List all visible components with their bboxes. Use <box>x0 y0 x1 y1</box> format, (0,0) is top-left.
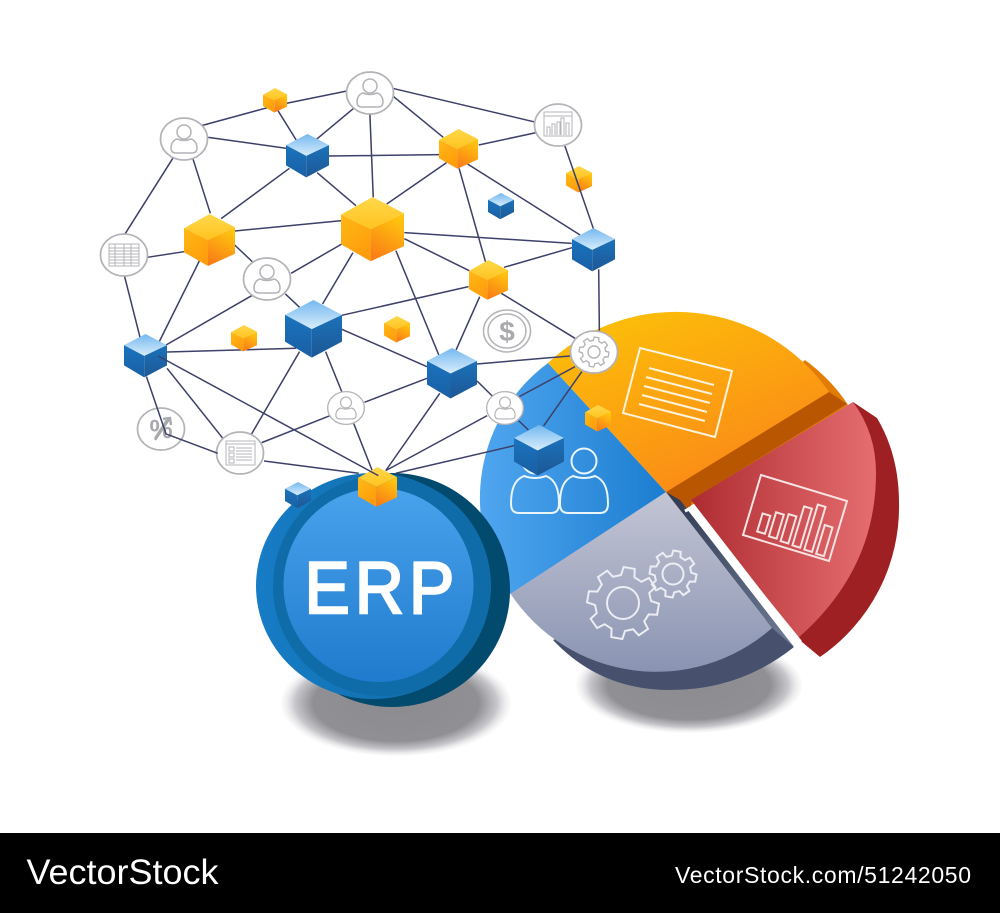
sphere: face <box>284 488 474 682</box>
cube: blue small bottom <box>285 482 311 508</box>
cube: orange top right <box>439 129 478 169</box>
icon: document on orange slice <box>623 348 732 437</box>
node: user small right <box>487 392 523 424</box>
pie: orange slice inner wall <box>666 392 847 512</box>
node: chart <box>534 104 582 146</box>
pie: orange slice <box>548 312 829 492</box>
footer bar <box>0 833 1000 913</box>
sphere: outer ring <box>256 473 490 699</box>
node: user middle <box>244 258 290 300</box>
overlaid connections crossing nodes <box>146 356 378 476</box>
cube: orange large center <box>341 197 404 261</box>
cube: orange small center <box>384 316 410 343</box>
cube: orange small left <box>231 325 257 352</box>
pie: red slice side <box>790 402 899 657</box>
node: percent <box>138 408 184 450</box>
cube: orange right middle <box>469 260 508 300</box>
pie: gray slice side <box>553 620 794 690</box>
pie: blue slice <box>480 363 666 594</box>
node: form <box>216 432 264 474</box>
cube: blue lower right <box>427 348 477 398</box>
sphere: inner ring <box>273 476 491 696</box>
shadow: ERP sphere <box>281 650 511 756</box>
sphere: dark back <box>274 473 510 707</box>
pie: orange slice side <box>666 360 848 512</box>
cube: blue large center <box>285 300 342 358</box>
cube: blue right <box>572 228 615 271</box>
node: user small center <box>328 392 364 424</box>
pie chart <box>480 312 899 690</box>
icon: gears on gray slice <box>582 547 700 644</box>
cube: blue small floating <box>488 193 514 219</box>
node: dollar <box>484 310 530 352</box>
node: percent: % <box>149 414 173 444</box>
pie: white gap <box>685 507 800 650</box>
pie: gray slice <box>510 492 772 672</box>
small cube: orange right <box>566 166 592 193</box>
pie: gray slice inner wall <box>666 492 794 647</box>
network connections <box>124 88 599 473</box>
cube: blue top <box>286 134 329 177</box>
node: user left <box>160 118 208 160</box>
cube: orange on pie <box>585 405 611 432</box>
shadow: pie <box>576 637 802 733</box>
cube: orange left <box>184 214 235 266</box>
footer url: VectorStock.com/51242050 <box>675 862 971 888</box>
ERP sphere <box>256 473 510 707</box>
node: gear <box>570 331 618 373</box>
node: table <box>100 234 148 276</box>
cube: blue on pie <box>514 425 564 476</box>
icon: people on blue slice <box>511 448 608 513</box>
node: user top <box>346 72 394 114</box>
cube: orange on sphere <box>358 467 397 507</box>
node: dollar: $ <box>499 316 515 347</box>
cube: orange small top <box>263 88 287 112</box>
footer brand: VectorStock <box>26 853 219 892</box>
cube: blue left <box>124 334 167 377</box>
icon: bar chart on red slice <box>743 475 847 561</box>
label: ERP: ERP <box>304 547 459 629</box>
pie: red slice <box>691 402 876 638</box>
